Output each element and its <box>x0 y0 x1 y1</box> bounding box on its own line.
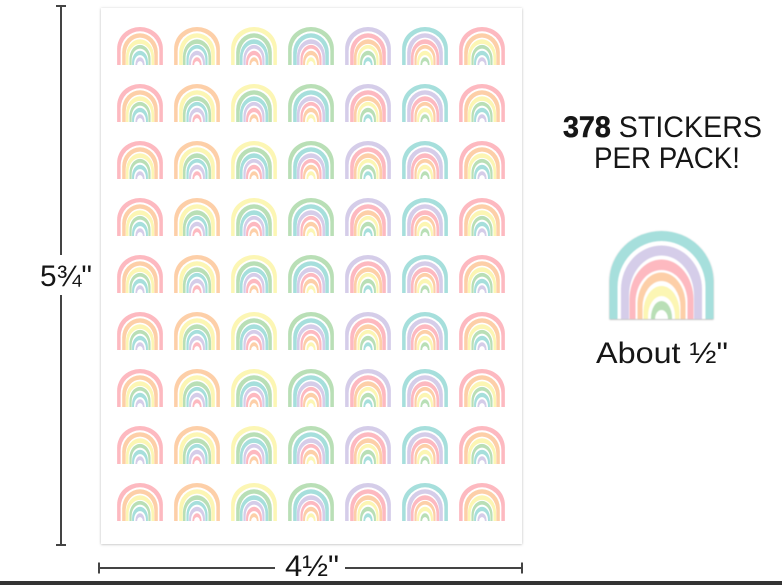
heading: per pack: PER PACK! <box>594 142 740 175</box>
sticker row 2 <box>117 84 505 122</box>
height dimension arrow <box>56 6 66 545</box>
sticker row 6 <box>117 312 505 350</box>
sticker row 7 <box>117 369 505 407</box>
height label: 5¾" <box>40 260 92 293</box>
sticker row 5 <box>117 255 505 293</box>
panel: sticker sheet <box>101 8 522 544</box>
size caption: About ½" <box>596 337 728 370</box>
width dimension arrow <box>99 562 522 574</box>
sticker row 3 <box>117 141 505 179</box>
heading: sticker count: 378 STICKERS <box>563 111 762 144</box>
bottom dark bar <box>0 581 782 585</box>
sticker row 9 <box>117 483 505 521</box>
icon: single rainbow sticker <box>610 231 714 319</box>
sticker row 4 <box>117 198 505 236</box>
sticker row 8 <box>117 426 505 464</box>
sticker grid <box>117 27 505 521</box>
width label: 4½" <box>285 550 339 583</box>
sticker row 1 <box>117 27 505 65</box>
